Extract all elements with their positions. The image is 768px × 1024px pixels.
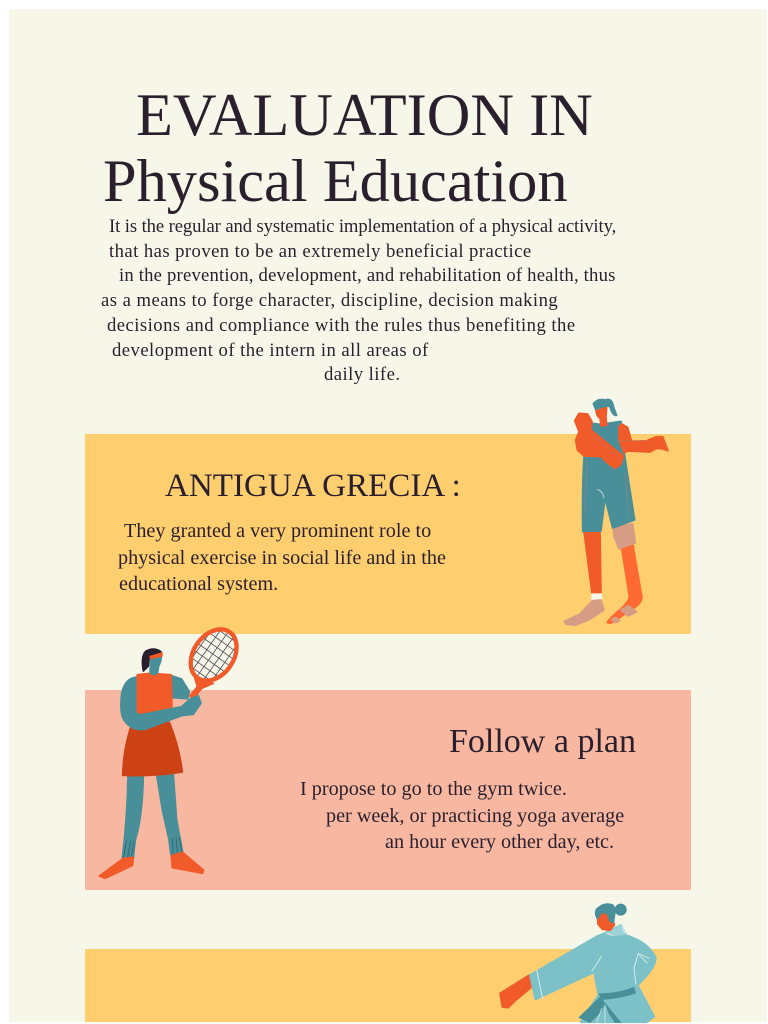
text block: Antigua Grecia body: They granted a very prominent role to (124, 520, 431, 542)
text block: Follow a plan body: an hour every other day, etc. (385, 831, 614, 853)
text block: Antigua Grecia body (118, 520, 446, 595)
text block: Follow a plan body: I propose to go to the gym twice. (300, 778, 567, 800)
icon: woman stretching arm (564, 399, 668, 625)
heading: Antigua Grecia: ANTIGUA GRECIA : (165, 468, 461, 504)
racket (188, 627, 239, 698)
text block: Follow a plan body: per week, or practicing yoga average (326, 805, 624, 827)
text block: intro definition: decisions and compliance with the rules thus benefiting the (107, 315, 576, 336)
text block: Follow a plan body (300, 778, 624, 853)
text block: intro definition: in the prevention, development, and rehabilitation of health, thus (119, 265, 616, 286)
text block: intro definition: development of the intern in all areas of (112, 340, 429, 361)
title (103, 82, 593, 215)
text block: intro definition: daily life. (324, 364, 400, 385)
text block: Antigua Grecia body: physical exercise in social life and in the (118, 547, 446, 569)
text block: intro definition: that has proven to be an extremely beneficial practice (109, 241, 532, 262)
title: EVALUATION IN (136, 82, 593, 149)
panel: yellow band Antigua Grecia (85, 434, 691, 634)
text block: intro definition: as a means to forge character, discipline, decision making (101, 290, 558, 311)
icon: woman in martial arts uniform (500, 904, 656, 1023)
panel: yellow band bottom (85, 949, 691, 1022)
title: Physical Education (103, 148, 568, 215)
text block: intro definition: It is the regular and systematic implementation of a physical activity, (109, 216, 616, 237)
text block: Antigua Grecia body: educational system. (119, 573, 278, 595)
panel: pink band Follow a plan (85, 690, 691, 890)
heading: Follow a plan: Follow a plan (449, 723, 636, 760)
icon: woman with tennis racket (99, 619, 247, 878)
text block: intro definition (101, 216, 616, 385)
